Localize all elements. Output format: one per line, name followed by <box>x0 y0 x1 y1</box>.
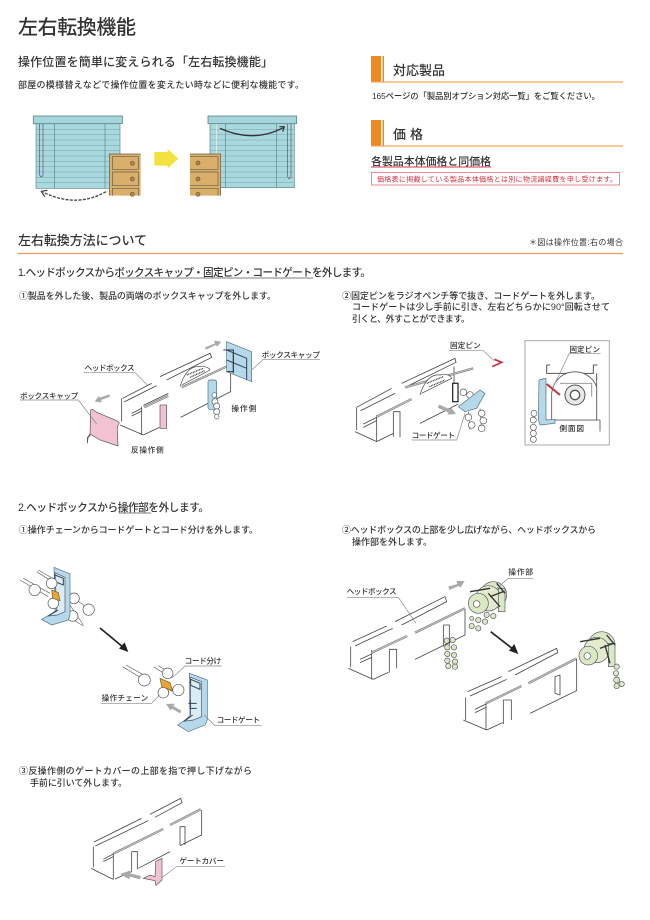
step 2-2 text: ②ヘッドボックスの上部を少し広げながら、ヘッドボックスから <box>342 524 596 535</box>
step 2-3 text: 手前に引いて外します。 <box>30 777 127 788</box>
chest of drawers, left <box>109 154 141 196</box>
gray arrow <box>120 871 141 879</box>
labels: 固定ピン <box>450 341 481 350</box>
price subheading: 各製品本体価格と同価格 <box>371 154 491 168</box>
panel: side view: 側面図 <box>559 423 584 433</box>
title: 左右転換機能 <box>18 16 136 39</box>
leader lines <box>347 578 533 623</box>
head box <box>355 358 473 442</box>
panel: side view <box>525 341 609 445</box>
step 1-2 text: 引くと、外すことができます。 <box>352 313 470 324</box>
cord gate with chain, before <box>20 567 94 626</box>
gray arrows <box>95 341 221 402</box>
head box <box>91 798 202 879</box>
black arrow <box>491 632 518 654</box>
left box cap, pink <box>87 409 119 446</box>
step 1-2 text: コードゲートは少し手前に引き、左右どちらかに90°回転させて <box>352 301 610 312</box>
head box, lower <box>463 648 577 730</box>
section heading: how to convert: 左右転換方法について <box>18 233 147 248</box>
leader lines <box>20 359 320 424</box>
dashed arrow: cord moves to the other side <box>41 190 106 200</box>
step 2-3 text <box>19 765 252 788</box>
labels: 操作部 <box>508 567 533 577</box>
gray arrow <box>166 704 181 713</box>
diagram: removing cord gate and cord splitter <box>20 567 262 732</box>
step 1-2 text <box>342 290 610 324</box>
cord splitter and chain, after <box>123 665 184 698</box>
labels: 反操作側 <box>131 445 164 455</box>
gray arrow <box>448 581 465 590</box>
heading: price <box>371 120 623 146</box>
leader line <box>162 867 225 877</box>
right box cap, blue <box>223 342 252 382</box>
step 2 heading: 2.ヘッドボックスから操作部を外します。 <box>18 501 209 514</box>
labels <box>347 567 533 596</box>
description text: 部屋の模様替えなどで操作位置を変えたい時などに便利な機能です。 <box>18 79 304 90</box>
step 1-1 text: ①製品を外した後、製品の両端のボックスキャップを外します。 <box>19 290 276 301</box>
step 2-1 text: ①操作チェーンからコードゲートとコード分けを外します。 <box>19 524 258 535</box>
leader lines <box>101 666 262 726</box>
labels: 操作側 <box>231 403 257 413</box>
head box, upper <box>348 597 465 679</box>
step 2-2 text: 操作部を外します。 <box>352 536 432 547</box>
labels <box>20 350 320 455</box>
label: ゲートカバー <box>179 855 224 865</box>
head box body <box>120 353 231 435</box>
diagram: removing the pin and cord gate <box>355 341 609 445</box>
panel: side view: 固定ピン <box>569 345 600 354</box>
cord gate and chain <box>208 380 220 419</box>
labels: ヘッドボックス <box>347 587 397 596</box>
gray arrow <box>438 405 456 415</box>
subheading: function summary: 操作位置を簡単に変えられる「左右転換機能」 <box>18 54 273 69</box>
black arrow <box>100 628 128 652</box>
operating unit, lower <box>579 632 624 689</box>
step 2-2 text <box>342 524 596 547</box>
heading: compatible products: 対応製品 <box>393 63 445 78</box>
cord gate, after <box>178 673 207 732</box>
step 2-3 text: ③反操作側のゲートカバーの上部を指で押し下げながら <box>19 765 252 776</box>
illustration: blind left/right conversion <box>33 116 297 200</box>
diagram: removing the gate cover <box>91 798 225 885</box>
note: operation side: ＊図は操作位置:右の場合 <box>529 237 623 247</box>
diagram: removing box caps <box>20 341 320 455</box>
labels: 操作チェーン <box>102 693 149 703</box>
heading: compatible products <box>371 56 623 82</box>
heading: price: 価 格 <box>393 127 423 142</box>
gate cover, pink <box>143 858 162 885</box>
blind with cord on the right <box>208 116 297 188</box>
labels: ボックスキャップ <box>20 392 79 401</box>
operating unit, upper <box>468 582 507 631</box>
labels <box>102 655 260 725</box>
chest of drawers, right <box>190 154 221 196</box>
compatible products note: 165ページの「製品別オプション対応一覧」をご覧ください。 <box>372 91 600 101</box>
labels: ヘッドボックス <box>85 364 135 373</box>
labels: ボックスキャップ <box>262 350 320 359</box>
diagram: removing the operating unit <box>347 567 624 730</box>
labels <box>412 341 481 440</box>
labels: コードゲート <box>412 430 455 440</box>
red notice box: 価格表に掲載している製品本体価格とは別に物流諸経費を申し受けます。 <box>377 174 617 184</box>
step 1 heading: 1.ヘッドボックスからボックスキャップ・固定ピン・コードゲートを外します。 <box>18 266 371 279</box>
labels: コード分け <box>185 655 222 665</box>
labels: コードゲート <box>217 715 260 725</box>
cord gate with chain <box>453 383 487 432</box>
red notice box <box>372 172 620 185</box>
step 1-2 text: ②固定ピンをラジオペンチ等で抜き、コードゲートを外します。 <box>342 290 600 301</box>
yellow arrow <box>154 149 178 168</box>
leader lines <box>412 351 494 440</box>
red fixing pin <box>492 359 502 367</box>
blind with cord on the left <box>33 116 122 188</box>
